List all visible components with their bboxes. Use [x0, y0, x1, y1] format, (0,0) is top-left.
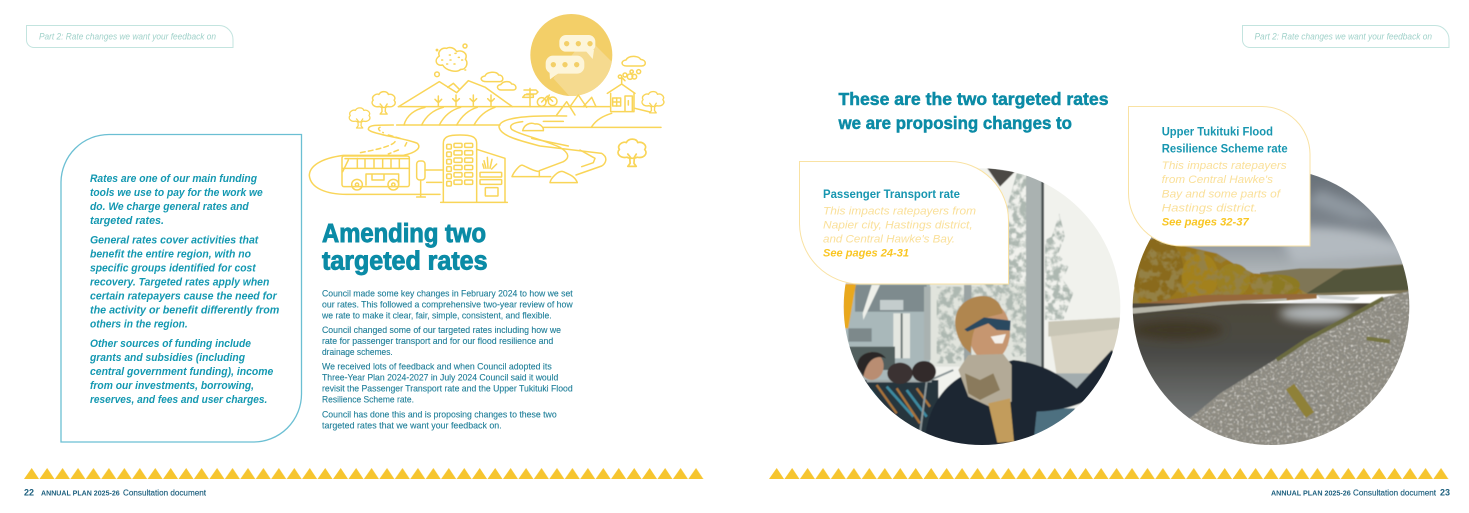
callout: passenger transport rate: See pages 24-31: [823, 248, 909, 260]
heading: amending two targeted rates: targeted rates: [322, 248, 488, 276]
footer: right page: [1271, 488, 1450, 498]
photo: woman on a bus: [840, 163, 1127, 450]
callout: upper tukituki flood resilience scheme rate: [1128, 106, 1310, 246]
text block: other funding sources: grants and subsidies (including: [89, 352, 245, 364]
icon: speech bubbles in circle: [530, 14, 615, 97]
callout: upper tukituki flood resilience scheme rate: Upper Tukituki Flood: [1162, 125, 1273, 139]
text block: body copy: revisit the Passenger Transport rate and the Upper Tukituki Flood: [322, 384, 573, 394]
callout: passenger transport rate: and Central Hawke's Bay.: [823, 234, 955, 246]
footer: left page: ANNUAL PLAN 2025-26: [41, 488, 120, 498]
triangle border: left page: [24, 467, 704, 480]
text block: body copy: We received lots of feedback and when Council adopted its: [322, 362, 552, 372]
text block: body copy: Council has done this and is proposing changes to these two: [322, 409, 557, 419]
text block: general rates: [90, 234, 280, 330]
footer: left page: [24, 488, 207, 498]
heading: the two targeted rates: we are proposing changes to: [838, 113, 1072, 133]
heading: amending two targeted rates: Amending two: [322, 220, 486, 248]
text block: body copy: targeted rates that we want your feedback on.: [322, 420, 502, 430]
panel: rates funding explainer: [61, 134, 302, 442]
text block: general rates: General rates cover activities that: [90, 234, 260, 246]
text block: rates intro: tools we use to pay for the work we: [90, 187, 263, 199]
text block: general rates: recovery. Targeted rates apply when: [90, 276, 270, 288]
text block: rates intro: targeted rates.: [90, 215, 164, 227]
text block: other funding sources: reserves, and fees and user charges.: [90, 394, 267, 406]
heading: the two targeted rates: These are the two targeted rates: [838, 89, 1109, 109]
footer: right page: ANNUAL PLAN 2025-26: [1271, 488, 1351, 498]
callout: upper tukituki flood resilience scheme rate: Resilience Scheme rate: [1162, 142, 1288, 156]
text block: other funding sources: Other sources of funding include: [90, 338, 251, 350]
section tab: right page: [1242, 26, 1449, 48]
text block: rates intro: Rates are one of our main funding: [90, 173, 257, 185]
footer: right page: Consultation document: [1353, 488, 1437, 498]
text block: body copy: Council made some key changes in February 2024 to how we set: [322, 289, 573, 299]
text block: rates intro: [90, 173, 263, 227]
callout: upper tukituki flood resilience scheme rate: from Central Hawke's: [1162, 174, 1273, 186]
text block: body copy: our rates. This followed a comprehensive two-year review of how: [322, 300, 573, 310]
text block: general rates: others in the region.: [90, 318, 188, 330]
illustration: region landscape with bus, buildings and speech bubbles: [309, 14, 664, 202]
callout: passenger transport rate: [800, 162, 1008, 284]
text block: general rates: benefit the entire region, with no: [90, 248, 251, 260]
text block: general rates: specific groups identified for cost: [90, 262, 257, 274]
section tab: left page: Part 2: Rate changes we want your feedback on: [39, 32, 216, 42]
heading: amending two targeted rates: [322, 220, 488, 276]
text block: rates intro: do. We charge general rates and: [90, 201, 249, 213]
section tab: left page: [26, 26, 233, 48]
photo: Tukituki river: [1130, 167, 1413, 457]
text block: general rates: certain ratepayers cause the need for: [90, 290, 277, 302]
footer: right page: 23: [1440, 488, 1450, 498]
heading: the two targeted rates: [838, 89, 1109, 133]
text block: body copy: Three-Year Plan 2024-2027 in July 2024 Council said it would: [322, 373, 558, 383]
callout: passenger transport rate: This impacts ratepayers from: [823, 206, 976, 218]
text block: general rates: the activity or benefit differently from: [90, 304, 280, 316]
text block: other funding sources: from our investments, borrowing,: [90, 380, 254, 392]
text block: body copy: we rate to make it clear, fair, simple, consistent, and flexible.: [321, 310, 552, 320]
footer: left page: Consultation document: [123, 488, 207, 498]
callout: upper tukituki flood resilience scheme rate: Hastings district.: [1162, 202, 1258, 214]
landscape line art: [309, 44, 664, 202]
callout: upper tukituki flood resilience scheme rate: Bay and some parts of: [1162, 188, 1282, 200]
callout: passenger transport rate: Napier city, Hastings district,: [823, 220, 973, 232]
callout: passenger transport rate: Passenger Transport rate: [823, 187, 960, 201]
callout: upper tukituki flood resilience scheme rate: See pages 32-37: [1162, 216, 1249, 228]
text block: body copy: drainage schemes.: [322, 347, 393, 357]
text block: other funding sources: central government funding), income: [90, 366, 273, 378]
footer: left page: 22: [24, 488, 34, 498]
text block: other funding sources: [89, 338, 273, 406]
text block: body copy: Resilience Scheme rate.: [322, 395, 414, 405]
callout: upper tukituki flood resilience scheme rate: This impacts ratepayers: [1162, 160, 1287, 172]
text block: body copy: rate for passenger transport and for our flood resilience and: [322, 336, 553, 346]
triangle border: right page: [769, 467, 1449, 480]
text block: body copy: Council changed some of our targeted rates including how we: [322, 325, 561, 335]
text block: body copy: [321, 289, 573, 430]
section tab: right page: Part 2: Rate changes we want your feedback on: [1254, 32, 1432, 42]
